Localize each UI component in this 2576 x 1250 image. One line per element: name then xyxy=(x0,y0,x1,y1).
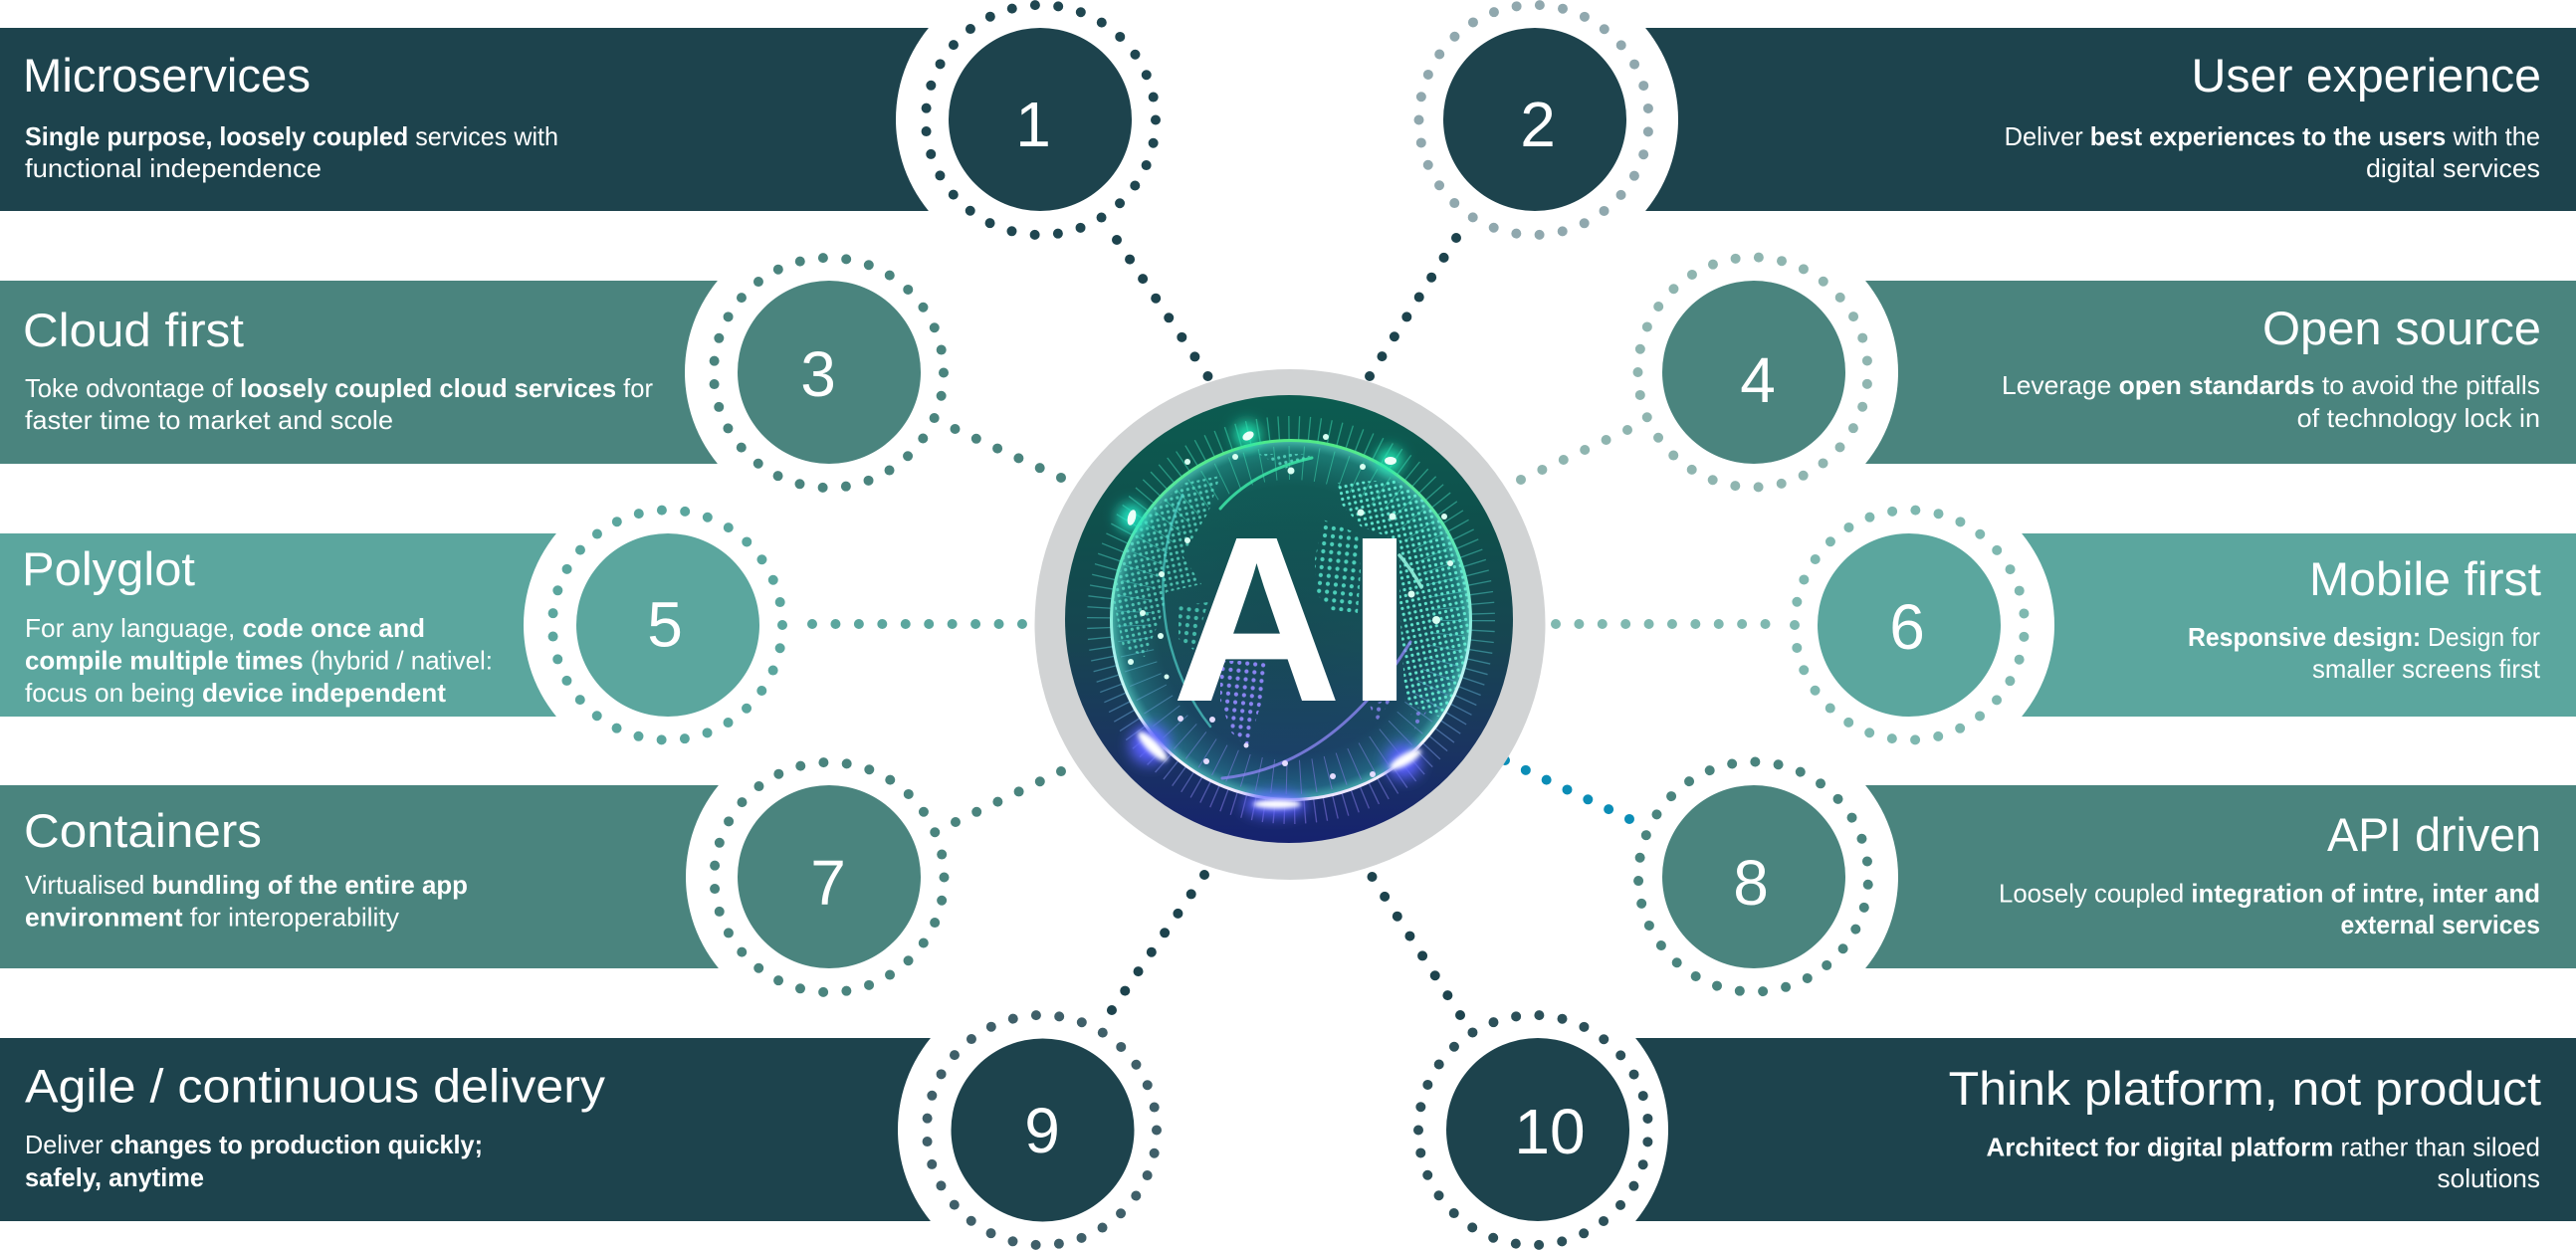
number 5: 5 xyxy=(647,589,683,661)
inner gradient disc xyxy=(1065,395,1513,843)
description: API driven xyxy=(1999,878,2540,939)
node 7 dotted ring xyxy=(715,762,944,992)
description: API driven: external services xyxy=(2341,910,2540,939)
grey outer ring xyxy=(1035,369,1545,880)
connector: 3 to centre xyxy=(956,429,1061,478)
panel: User experience xyxy=(1390,0,2576,264)
node 7 disc xyxy=(738,785,921,968)
node 8 dotted ring xyxy=(1634,758,1872,995)
globe rim xyxy=(1111,440,1471,800)
number 6: 6 xyxy=(1889,591,1925,663)
description: Polyglot: focus on being device independent xyxy=(25,678,446,708)
description: Mobile first xyxy=(2188,622,2541,684)
heading: Open source: Open source xyxy=(2262,302,2541,354)
heading: User experience: User experience xyxy=(2192,49,2541,102)
panel: Polyglot xyxy=(0,481,812,769)
glow highlights xyxy=(1118,422,1423,816)
node 3 dotted ring xyxy=(714,258,944,488)
node 6 dotted ring xyxy=(1795,510,2025,740)
central AI globe xyxy=(1035,369,1545,880)
description: Microservices xyxy=(25,121,558,183)
description: Agile / continuous delivery xyxy=(25,1130,483,1192)
connector: 10 to centre xyxy=(1372,877,1460,1015)
description: Mobile first: smaller screens first xyxy=(2312,654,2541,684)
heading: Containers: Containers xyxy=(24,804,262,857)
panel: Mobile first xyxy=(1766,481,2576,769)
description: Containers: Virtualised bundling of the entire app xyxy=(25,870,468,900)
description: Microservices: functional independence xyxy=(25,153,322,183)
connector: 6 to centre xyxy=(1556,619,1766,629)
connector: 1 to centre xyxy=(1117,240,1208,376)
number 9: 9 xyxy=(1024,1095,1060,1166)
description: Agile / continuous delivery: safely, anytime xyxy=(25,1162,204,1192)
node 10 disc xyxy=(1446,1038,1629,1221)
connector: 4 to centre xyxy=(1521,430,1627,480)
node 3 disc xyxy=(738,281,921,464)
inner radial streaks xyxy=(1134,463,1448,777)
heading: Mobile first: Mobile first xyxy=(2309,552,2541,605)
description: Think platform, not product: Architect for digital platform rather than siloed xyxy=(1987,1133,2540,1162)
heading: API driven: API driven xyxy=(2327,808,2541,861)
node 5 disc xyxy=(576,533,759,717)
number 8: 8 xyxy=(1733,847,1769,919)
description: Think platform, not product xyxy=(1987,1133,2540,1193)
heading: Think platform, not product: Think platform, not product xyxy=(1949,1062,2541,1115)
number 4: 4 xyxy=(1740,344,1776,416)
description: Containers: environment for interoperability xyxy=(25,902,399,932)
connector: 7 to centre xyxy=(956,771,1061,822)
number 10: 10 xyxy=(1514,1096,1586,1167)
description: Polyglot xyxy=(25,613,493,708)
node 1 disc xyxy=(949,28,1132,211)
number 1: 1 xyxy=(1015,89,1051,160)
panel: Agile / continuous delivery xyxy=(0,985,1186,1250)
node 1 dotted ring xyxy=(926,5,1156,235)
panel: Cloud first xyxy=(0,228,973,517)
node 10 dotted ring xyxy=(1418,1015,1648,1245)
node 8 disc xyxy=(1662,785,1845,968)
panel: Containers xyxy=(0,732,974,1021)
description: Polyglot: compile multiple times (hybrid / nativel: xyxy=(25,645,493,675)
description: Cloud first: Toke odvontage of loosely coupled cloud services for xyxy=(25,373,653,403)
node 2 disc xyxy=(1443,28,1626,211)
heading: Microservices: Microservices xyxy=(23,49,311,102)
description: Mobile first: Responsive design: Design for xyxy=(2188,622,2540,652)
node 4 disc xyxy=(1662,281,1845,464)
connector: 9 to centre xyxy=(1112,875,1204,1010)
panel: Think platform, not product xyxy=(1380,985,2576,1250)
node 4 dotted ring xyxy=(1638,257,1867,488)
continents of dots xyxy=(1113,454,1471,777)
description: Cloud first: faster time to market and scole xyxy=(25,405,393,435)
description: Cloud first xyxy=(25,373,653,435)
AI lettering: AI xyxy=(1172,488,1412,751)
description: Open source: Leverage open standards to avoid the pitfalls xyxy=(2002,370,2540,400)
number 2: 2 xyxy=(1520,89,1556,160)
description: Open source: of technology lock in xyxy=(2297,403,2540,433)
description: Think platform, not product: solutions xyxy=(2437,1163,2540,1193)
panel: API driven xyxy=(1610,732,2576,1021)
globe sphere xyxy=(1112,441,1470,799)
description: User experience: Deliver best experiences to the users with the xyxy=(2005,121,2540,151)
radial ticks around globe xyxy=(1099,428,1483,812)
description: Polyglot: For any language, code once and xyxy=(25,613,425,643)
description: Containers xyxy=(25,870,468,932)
node 2 dotted ring xyxy=(1419,5,1648,235)
panel: Open source xyxy=(1610,228,2576,517)
connector: 2 to centre xyxy=(1370,238,1456,376)
description: Microservices: Single purpose, loosely coupled services with xyxy=(25,121,558,151)
heading: Polyglot: Polyglot xyxy=(22,542,195,595)
heading: Cloud first: Cloud first xyxy=(23,304,244,356)
node 9 dotted ring xyxy=(927,1015,1157,1245)
description: Open source xyxy=(2002,370,2540,433)
connector: 8 to centre xyxy=(1505,760,1629,819)
number 7: 7 xyxy=(810,847,846,919)
description: User experience: digital services xyxy=(2366,153,2540,183)
description: Agile / continuous delivery: Deliver changes to production quickly; xyxy=(25,1130,483,1159)
small glowing points xyxy=(1128,434,1453,679)
connector: 5 to centre xyxy=(812,619,1022,629)
number 3: 3 xyxy=(800,338,836,410)
node 6 disc xyxy=(1818,533,2001,717)
orbit arcs xyxy=(1163,458,1421,778)
panel: Microservices xyxy=(0,0,1184,264)
description: API driven: Loosely coupled integration of intre, inter and xyxy=(1999,878,2540,908)
description: User experience xyxy=(2005,121,2540,183)
heading: Agile / continuous delivery: Agile / continuous delivery xyxy=(25,1059,606,1113)
node 5 dotted ring xyxy=(552,510,782,740)
node 9 disc xyxy=(952,1039,1135,1222)
